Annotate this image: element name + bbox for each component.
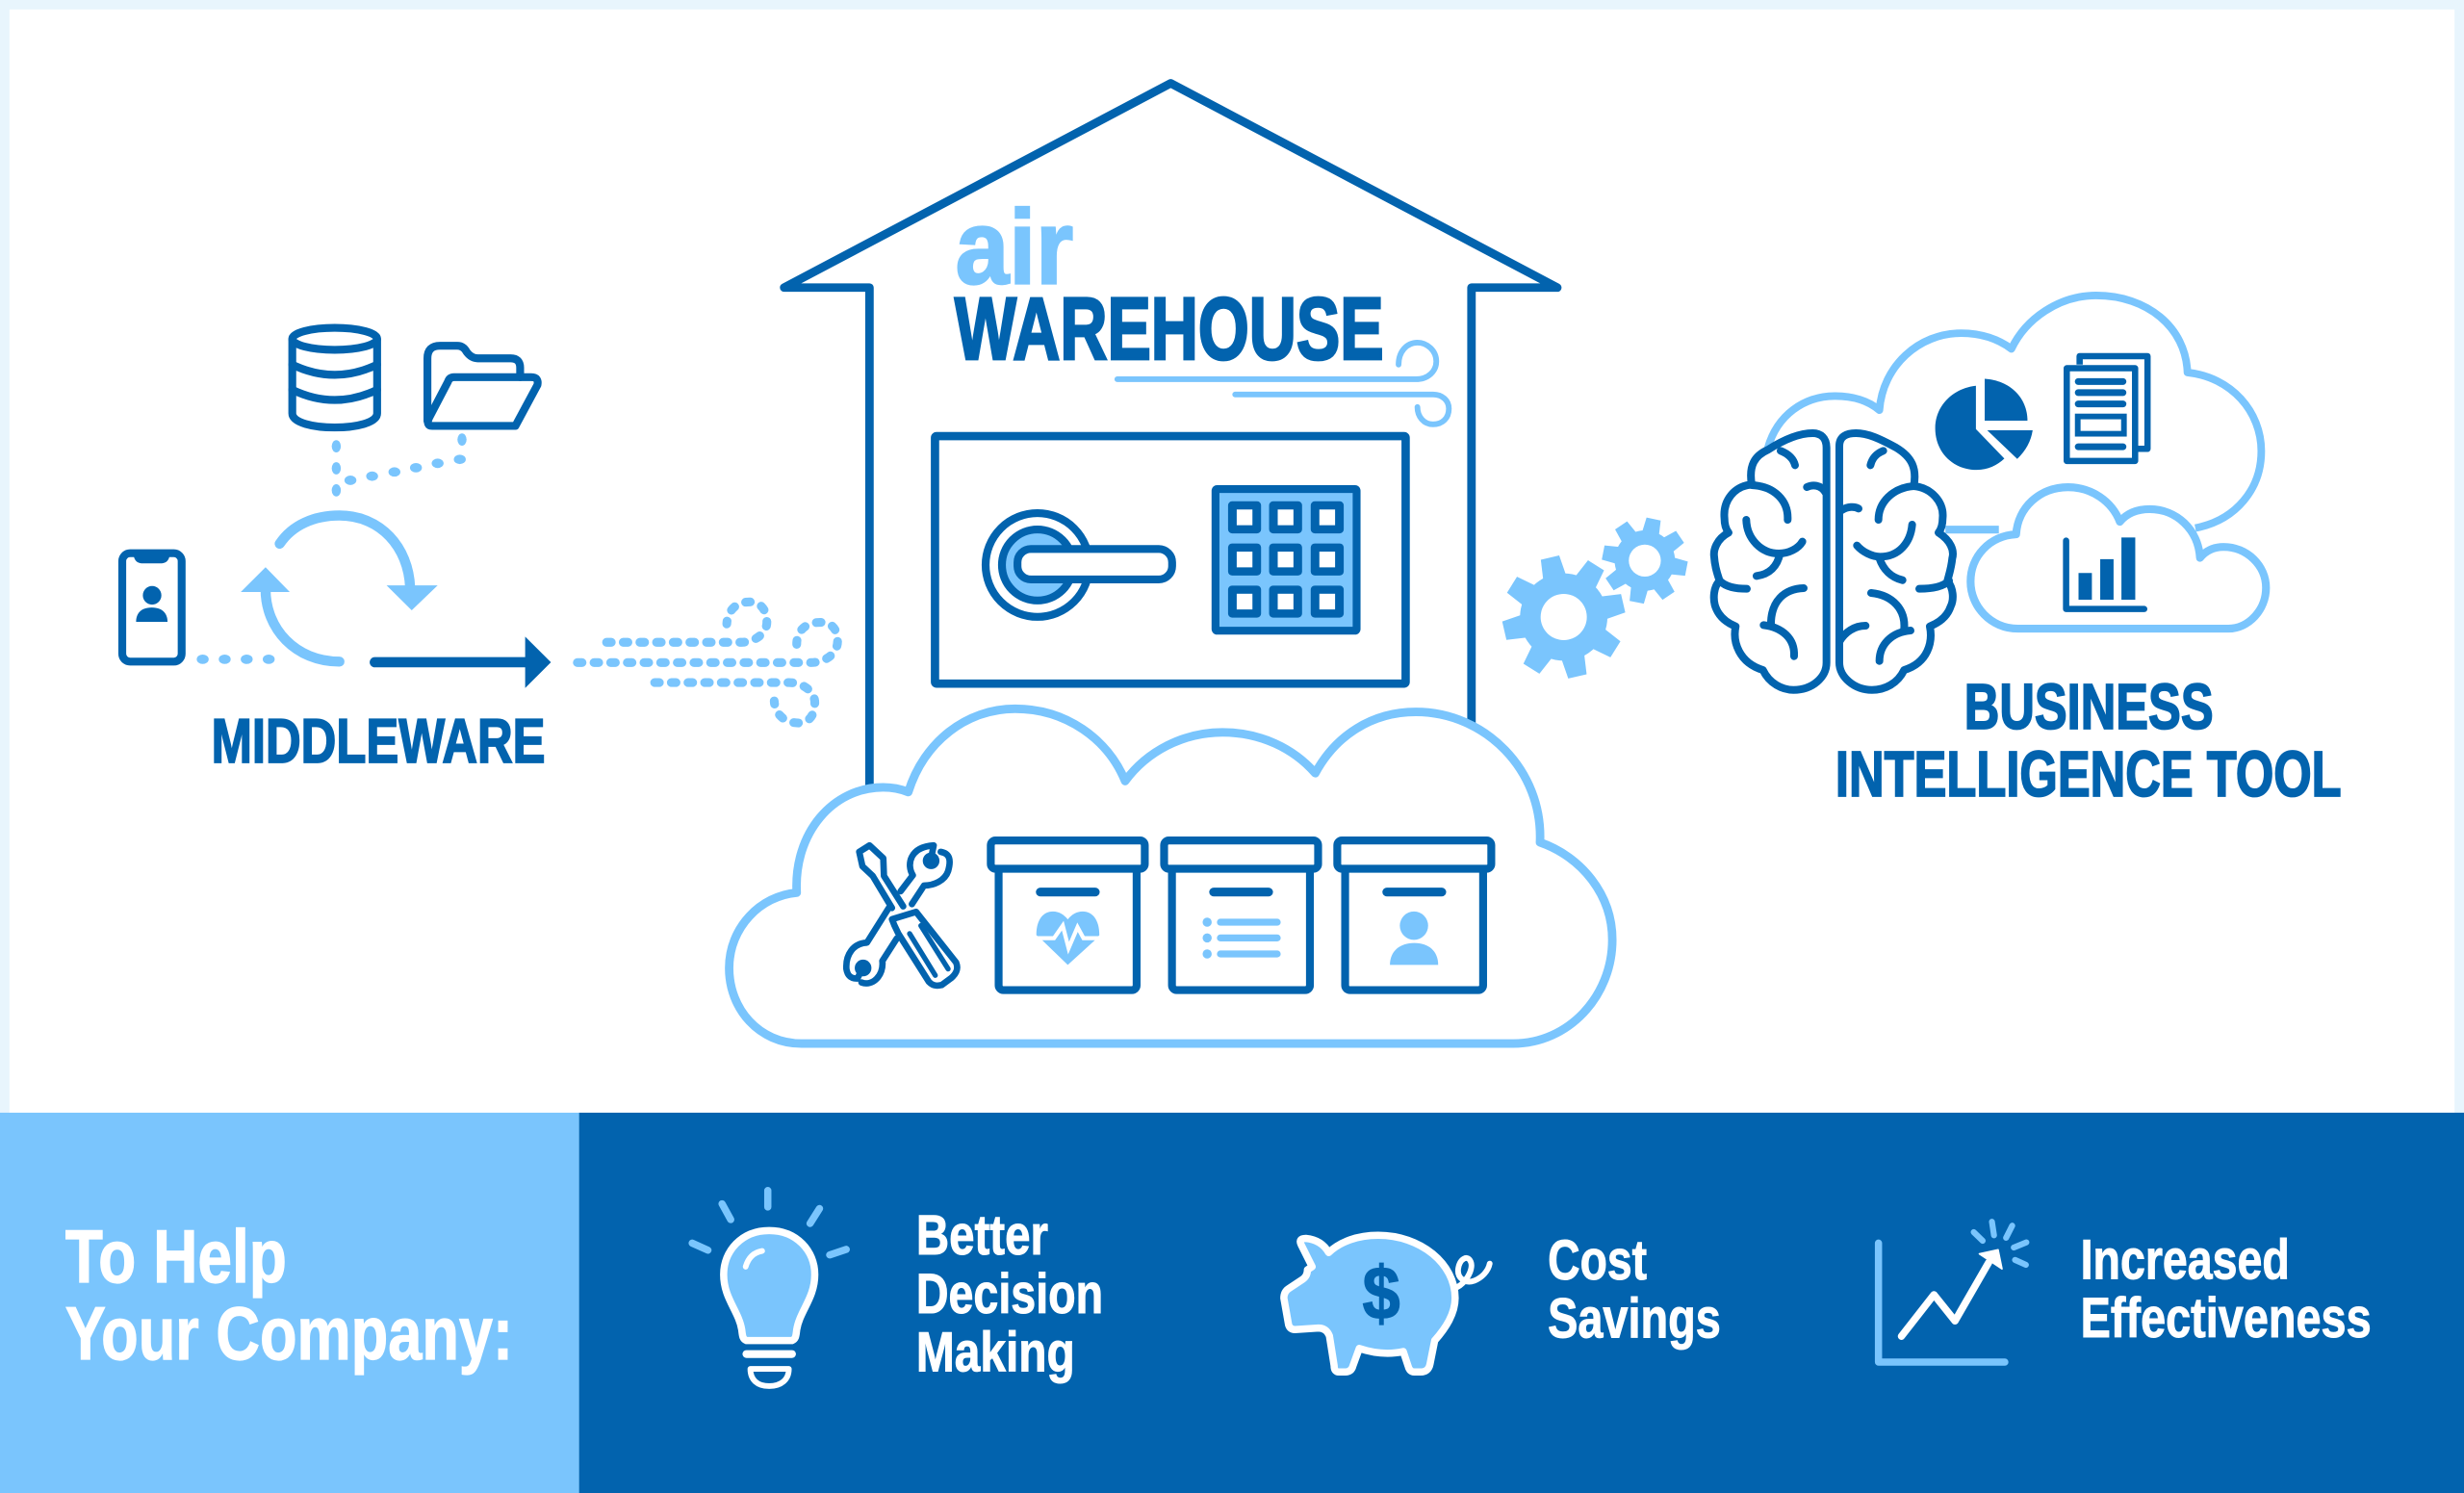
benefit text: increased effectiveness: Increased: [2081, 1228, 2290, 1291]
icon: piggy bank: [1284, 1235, 1490, 1372]
large cloud: [1768, 296, 2261, 528]
benefit text: better decision making: Making: [916, 1322, 1075, 1384]
panel: cloud storage: [730, 708, 1612, 1043]
icon: vault handle: [986, 513, 1172, 617]
icon: gears: [1502, 517, 1688, 679]
benefit text: better decision making: [916, 1204, 1103, 1384]
vault door: [935, 436, 1405, 683]
small cloud: [1970, 487, 2266, 629]
benefit text: cost savings: Savings: [1548, 1287, 1721, 1350]
icon: documents: [2066, 356, 2147, 461]
panel: air warehouse house: [784, 84, 1557, 802]
dotted connector: phone to middleware: [196, 655, 274, 664]
panel: benefits: [579, 1113, 2464, 1493]
logo word: warehouse: WAREHOUSE: [955, 280, 1384, 378]
panel: middleware: [122, 328, 551, 776]
icon: box with person: [1337, 840, 1491, 991]
heading line two: Your Company:: [65, 1291, 513, 1376]
icon: phone: [122, 553, 182, 661]
cloud outline: [730, 708, 1612, 1043]
heading line one: To Help: [65, 1214, 287, 1299]
benefit text: increased effectiveness: [2081, 1228, 2372, 1350]
heading: business: BUSINESS: [1964, 671, 2214, 743]
icon: brain: [1714, 433, 1953, 690]
benefit text: cost savings: Cost: [1548, 1229, 1647, 1292]
icon: rising chart: [1879, 1222, 2026, 1362]
benefit text: increased effectiveness: Effectiveness: [2081, 1287, 2372, 1350]
icon: cycle arrows: [241, 516, 438, 661]
icon: database: [293, 328, 377, 427]
icon: bar chart: [2066, 537, 2144, 609]
benefit text: better decision making: Decision: [916, 1263, 1103, 1326]
icon: box with health record: [990, 840, 1144, 991]
icon: dotted wind: [578, 602, 837, 723]
icon: screwdriver: [860, 845, 957, 986]
house outline: [784, 84, 1557, 802]
arrow: middleware to warehouse: [374, 636, 551, 688]
icon: wrench: [846, 845, 950, 984]
panel: to help your company: [0, 1113, 579, 1493]
logo word: air: air: [956, 190, 1073, 307]
icon: pie chart: [1936, 378, 2033, 470]
benefit text: better decision making: Better: [916, 1204, 1048, 1267]
icon: light bulb: [692, 1191, 846, 1386]
heading: middleware: MIDDLEWARE: [212, 706, 546, 776]
panel: business intelligence tool: [1714, 296, 2342, 811]
icon: piggy bank: $: [1363, 1250, 1400, 1335]
dotted connector: database and folder to middleware: [332, 433, 467, 497]
icon: folder: [427, 346, 538, 425]
icon: logo wind lines: [1117, 343, 1449, 425]
icon: keypad: [1216, 489, 1356, 631]
benefit text: cost savings: [1548, 1229, 1721, 1350]
icon: box with list: [1164, 840, 1318, 991]
